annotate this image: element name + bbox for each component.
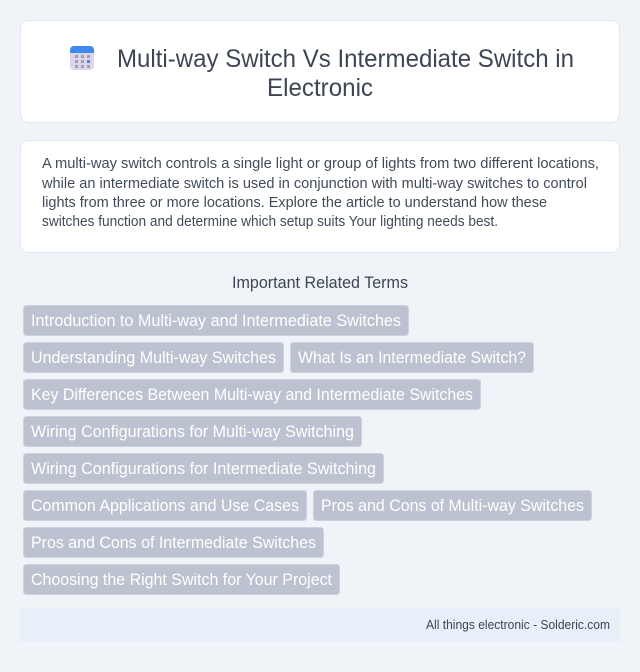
tag: pros cons intermediate (24, 528, 324, 558)
tag: wiring intermediate (24, 454, 384, 484)
tag: choosing switch: Choosing the Right Switch for Your Project (31, 571, 332, 589)
text block: description (41, 156, 599, 230)
tag: what is intermediate (290, 342, 534, 372)
panel: description (20, 140, 620, 252)
tag: common applications: Common Applications and Use Cases (31, 497, 299, 515)
tag: pros cons intermediate: Pros and Cons of Intermediate Switches (31, 534, 316, 552)
tag: introduction: Introduction to Multi-way and Intermediate Switches (31, 312, 401, 330)
tag: key differences (24, 380, 480, 410)
text block: description: lights from three or more locations. Explore the article to understand how these (42, 195, 547, 211)
tag: pros cons multi-way (314, 490, 592, 520)
title: Multi-way Switch Vs Intermediate Switch in (117, 45, 574, 73)
tag: wiring multi-way: Wiring Configurations for Multi-way Switching (31, 423, 354, 441)
footer: All things electronic - Solderic.com (426, 618, 610, 632)
footer (20, 608, 620, 642)
icon: calendar (70, 46, 94, 70)
tag: common applications (24, 490, 306, 520)
title (117, 45, 574, 102)
text block: description: switches function and determine which setup suits Your lighting needs best. (42, 214, 498, 230)
tag: pros cons multi-way: Pros and Cons of Multi-way Switches (321, 497, 584, 515)
text block: description: A multi-way switch controls a single light or group of lights from two different locations, (42, 156, 599, 172)
tag: understanding multi-way (24, 342, 284, 372)
tag group: related terms (24, 306, 592, 594)
tag: choosing switch (24, 564, 340, 594)
tag: key differences: Key Differences Between Multi-way and Intermediate Switches (31, 386, 473, 404)
tag: what is intermediate: What Is an Intermediate Switch? (298, 349, 526, 367)
tag: wiring intermediate: Wiring Configurations for Intermediate Switching (31, 460, 376, 478)
tag: understanding multi-way: Understanding Multi-way Switches (31, 349, 276, 367)
panel: header (20, 20, 620, 122)
text block: description: while an intermediate switch is used in conjunction with multi-way switches to control (41, 176, 587, 192)
tag: introduction (24, 306, 408, 336)
tag: wiring multi-way (24, 416, 362, 446)
title: Electronic (267, 74, 373, 102)
heading: related terms: Important Related Terms (232, 274, 408, 292)
